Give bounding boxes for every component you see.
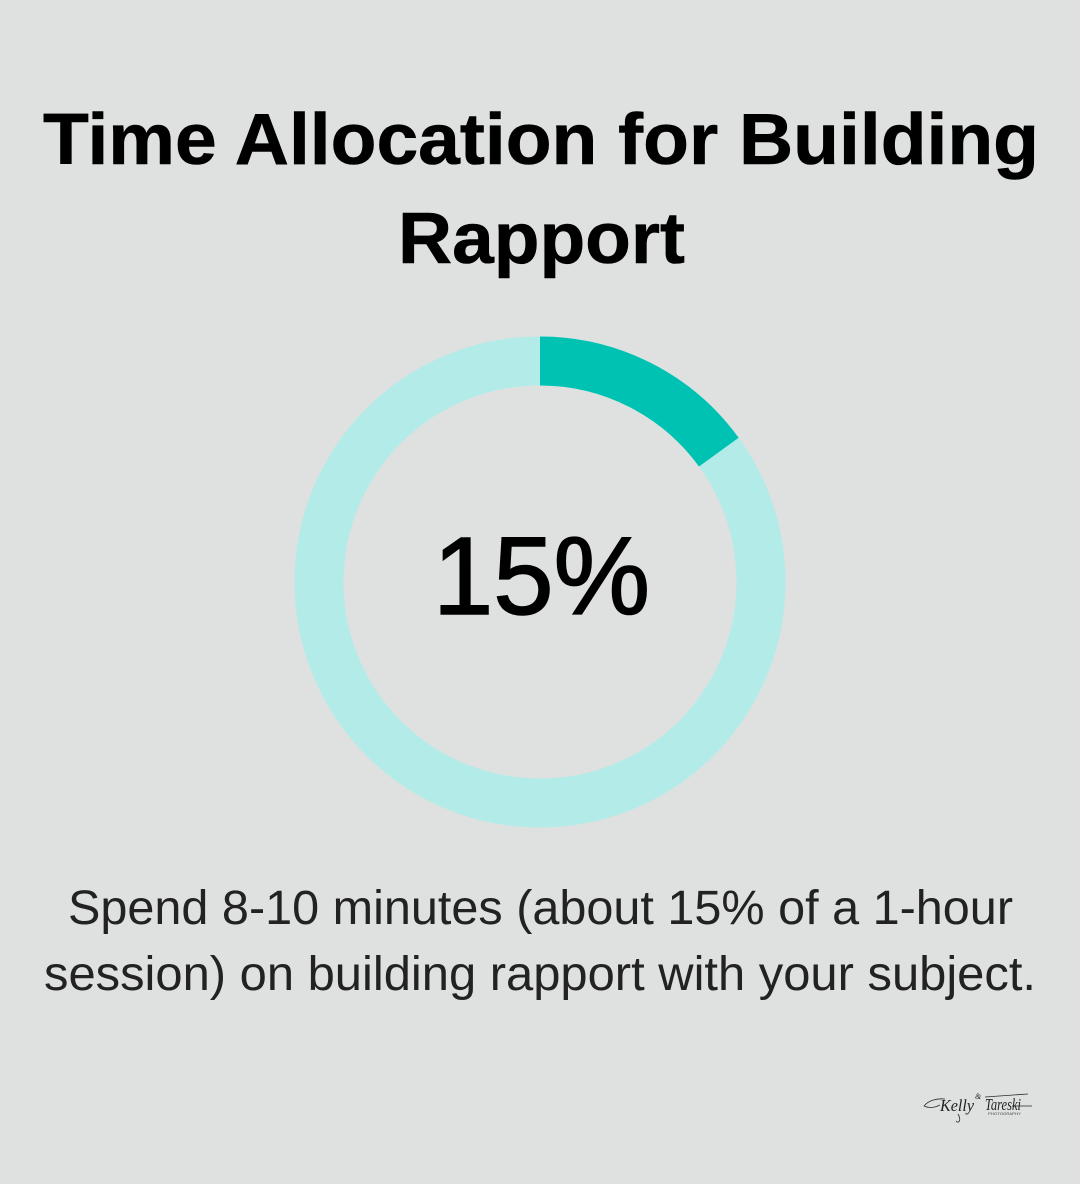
signature name [939, 1092, 1021, 1115]
donut highlighted segment [540, 361, 719, 452]
description text: session) on building rapport with your subject. [44, 947, 1036, 1001]
signature name: Kelly [939, 1096, 974, 1115]
signature name: & [975, 1092, 982, 1101]
center percentage: 15% [433, 515, 650, 638]
signature name: Tareski [985, 1095, 1021, 1114]
title [43, 100, 1039, 279]
signature flourish [924, 1094, 1032, 1122]
signature subtitle: PHOTOGRAPHY [988, 1112, 1022, 1116]
description text [44, 881, 1036, 1001]
donut chart: 15% [319, 361, 761, 803]
signature logo [924, 1092, 1032, 1122]
description text: Spend 8-10 minutes (about 15% of a 1-hour [68, 881, 1013, 935]
title: Rapport [398, 199, 685, 279]
donut track [319, 361, 761, 803]
title: Time Allocation for Building [43, 100, 1039, 180]
